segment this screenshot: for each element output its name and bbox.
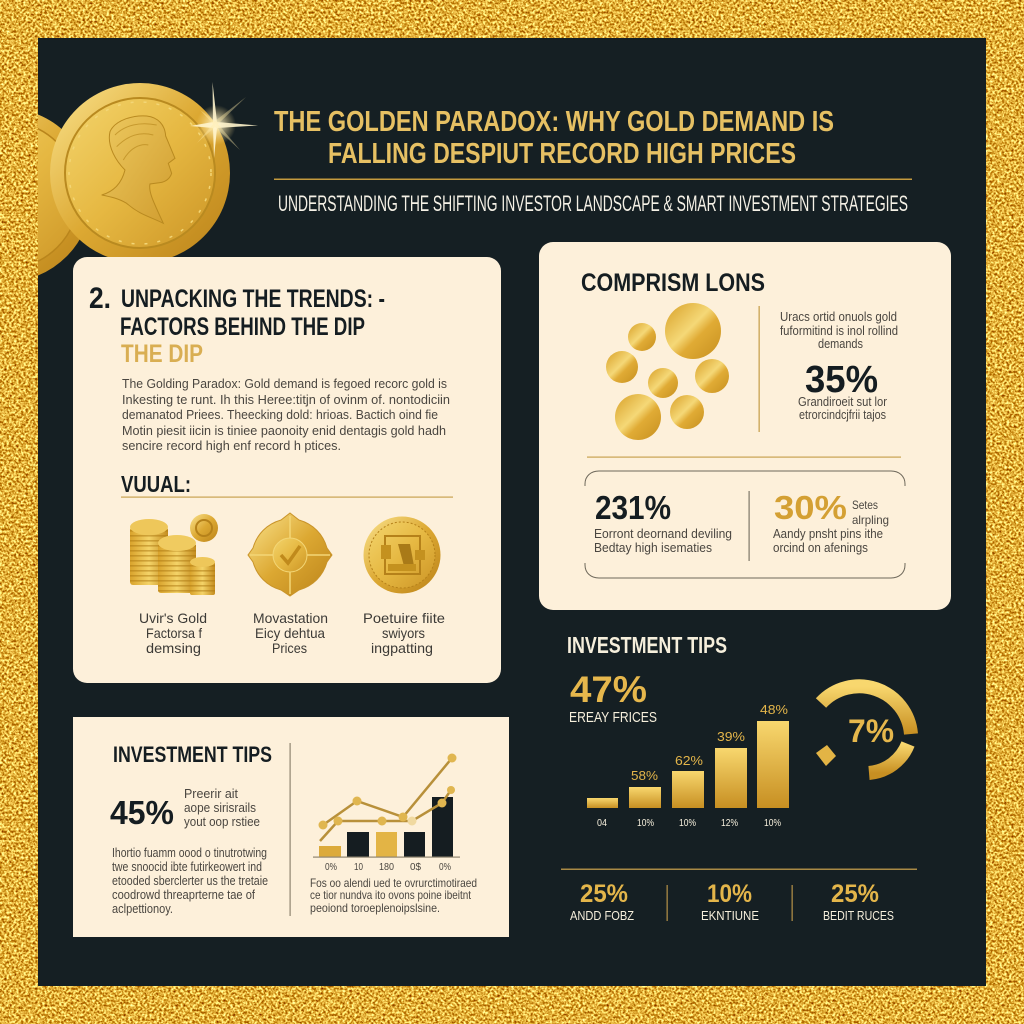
stat: 45%: 45% xyxy=(110,794,174,831)
tips text: aclpettionoy. xyxy=(112,902,173,916)
bar chart: 12% xyxy=(721,817,738,829)
tips text: coodrowd threaprterne tae of xyxy=(112,888,255,902)
icon: gold coins with profile xyxy=(38,83,230,276)
stat: 25% right: BEDIT RUCES xyxy=(823,908,894,923)
section heading: THE DIP xyxy=(121,340,203,368)
bar chart: 39% xyxy=(717,729,745,744)
stat: 25% left: 25% xyxy=(580,880,628,908)
section heading xyxy=(120,285,385,368)
icon: coin stacks xyxy=(130,514,218,595)
title: FALLING DESPIUT RECORD HIGH PRICES xyxy=(328,138,796,170)
visual heading: VUUAL: xyxy=(121,471,191,497)
body text: Inkesting te runt. Ih this Heree:titjn of ovinm of. nontodiciin xyxy=(122,392,450,407)
icon: emblem coin xyxy=(364,516,440,594)
bar chart: 10% xyxy=(637,817,654,829)
chart caption: ce tior nundva ito ovons poine ibeitnt xyxy=(310,888,472,902)
icon captions xyxy=(139,610,445,656)
icon captions: Prices xyxy=(272,640,307,656)
combo chart: 10 xyxy=(354,862,363,873)
stat: 30%: 30% xyxy=(774,489,847,526)
body text: sencire record high enf record h ptices. xyxy=(122,438,341,453)
stat: 10%: EKNTIUNE xyxy=(701,908,759,923)
stat: 25% left xyxy=(570,880,634,923)
bar chart: 10% xyxy=(679,817,696,829)
stat: 231%: Bedtay high isematies xyxy=(594,540,712,555)
body text: The Golding Paradox: Gold demand is fegoed recorc gold is xyxy=(122,376,447,391)
tips text: twe snoocid ibte futirkeowert ind xyxy=(112,860,262,874)
stat note top: fuformitind is inol rollind xyxy=(780,324,898,338)
icon captions: Uvir's Gold xyxy=(139,610,207,626)
tips text: etooded sberclerter us the tretaie xyxy=(112,874,268,888)
stat: 231% xyxy=(594,489,732,555)
body text xyxy=(122,376,450,453)
bar chart xyxy=(587,702,789,829)
title xyxy=(274,106,834,170)
panel: investment tips left xyxy=(73,717,509,937)
title rule xyxy=(274,178,912,180)
panel: unpacking the trends xyxy=(73,257,501,683)
stat label: EREAY FRICES xyxy=(569,709,657,726)
stat: 25% right xyxy=(823,880,894,923)
icon: check medal xyxy=(248,513,332,596)
stat: 231%: Eorront deornand deviling xyxy=(594,526,732,541)
stat: 25% left: ANDD FOBZ xyxy=(570,908,634,923)
bar chart: 04 xyxy=(597,817,607,829)
body text: Motin piesit iicin is tiniee paonoity enid dentagis gold hadh xyxy=(122,423,446,438)
stat note top: Uracs ortid onuols gold xyxy=(780,310,897,324)
chart caption xyxy=(310,876,477,915)
stat note bottom: Grandiroeit sut lor xyxy=(798,395,887,409)
stat: 47%: 47% xyxy=(570,669,647,710)
icon: coin sparkle xyxy=(190,82,258,158)
stat note xyxy=(184,787,260,829)
bracket frame xyxy=(585,471,905,578)
title: THE GOLDEN PARADOX: WHY GOLD DEMAND IS xyxy=(274,106,834,138)
bar chart: 10% xyxy=(764,817,781,829)
combo chart: 180 xyxy=(379,862,394,873)
chart caption: Fos oo alendi ued te ovrurctimotiraed xyxy=(310,876,477,890)
panel: comparisons xyxy=(539,242,951,610)
tips text xyxy=(112,846,268,916)
icon captions: Factorsa f xyxy=(146,625,202,641)
icon captions: Poetuire fiite xyxy=(363,610,445,626)
stat note: Preerir ait xyxy=(184,787,239,801)
stat: 231%: 231% xyxy=(595,489,671,526)
heading: COMPRISM LONS xyxy=(581,269,765,297)
stat note bottom: etrorcindcjfrii tajos xyxy=(799,408,886,422)
chart caption: peoiond toroeplenoipslsine. xyxy=(310,901,440,915)
icon captions: Movastation xyxy=(253,610,328,626)
stat: 25% right: 25% xyxy=(831,880,879,908)
bar chart: 58% xyxy=(631,768,658,783)
icon captions: ingpatting xyxy=(371,640,433,656)
combo chart: 0$ xyxy=(410,862,421,873)
stat: 10% xyxy=(701,880,759,923)
stat note top: demands xyxy=(818,337,863,351)
donut gauge: 7% xyxy=(848,713,894,749)
heading: INVESTMENT TIPS xyxy=(113,742,272,767)
gold circles cluster xyxy=(606,303,729,440)
stat: 35%: 35% xyxy=(805,359,878,401)
stat note: aope sirisrails xyxy=(184,801,256,815)
icon captions: swiyors xyxy=(382,625,425,641)
section: investment tips right xyxy=(561,632,917,923)
combo chart xyxy=(313,754,460,873)
donut gauge xyxy=(816,686,911,773)
section heading: UNPACKING THE TRENDS: - xyxy=(121,285,385,313)
body text: demanatod Priees. Theecking dold: hrioas. Bactich oind fie xyxy=(122,407,438,422)
stat note: yout oop rstiee xyxy=(184,815,260,829)
section heading: FACTORS BEHIND THE DIP xyxy=(120,313,365,341)
stat: 30%: Aandy pnsht pins ithe xyxy=(773,526,883,541)
stat: 30%: alrpling xyxy=(852,513,889,527)
stat note top xyxy=(780,310,898,351)
combo chart: 0% xyxy=(439,862,451,873)
stat: 10%: 10% xyxy=(707,880,752,908)
stat note bottom xyxy=(798,395,887,422)
stat: 30% xyxy=(773,489,889,555)
section number: 2. xyxy=(89,282,111,315)
bar chart: 62% xyxy=(675,753,703,768)
bar chart: 48% xyxy=(760,702,788,717)
tips text: Ihortio fuamm oood o tinutrotwing xyxy=(112,846,267,860)
icon captions: demsing xyxy=(146,640,201,656)
stat: 30%: orcind on afenings xyxy=(773,540,868,555)
stat: 30%: Setes xyxy=(852,498,878,512)
icon captions: Eicy dehtua xyxy=(255,625,325,641)
combo chart: 0% xyxy=(325,862,337,873)
heading: INVESTMENT TIPS xyxy=(567,632,727,658)
